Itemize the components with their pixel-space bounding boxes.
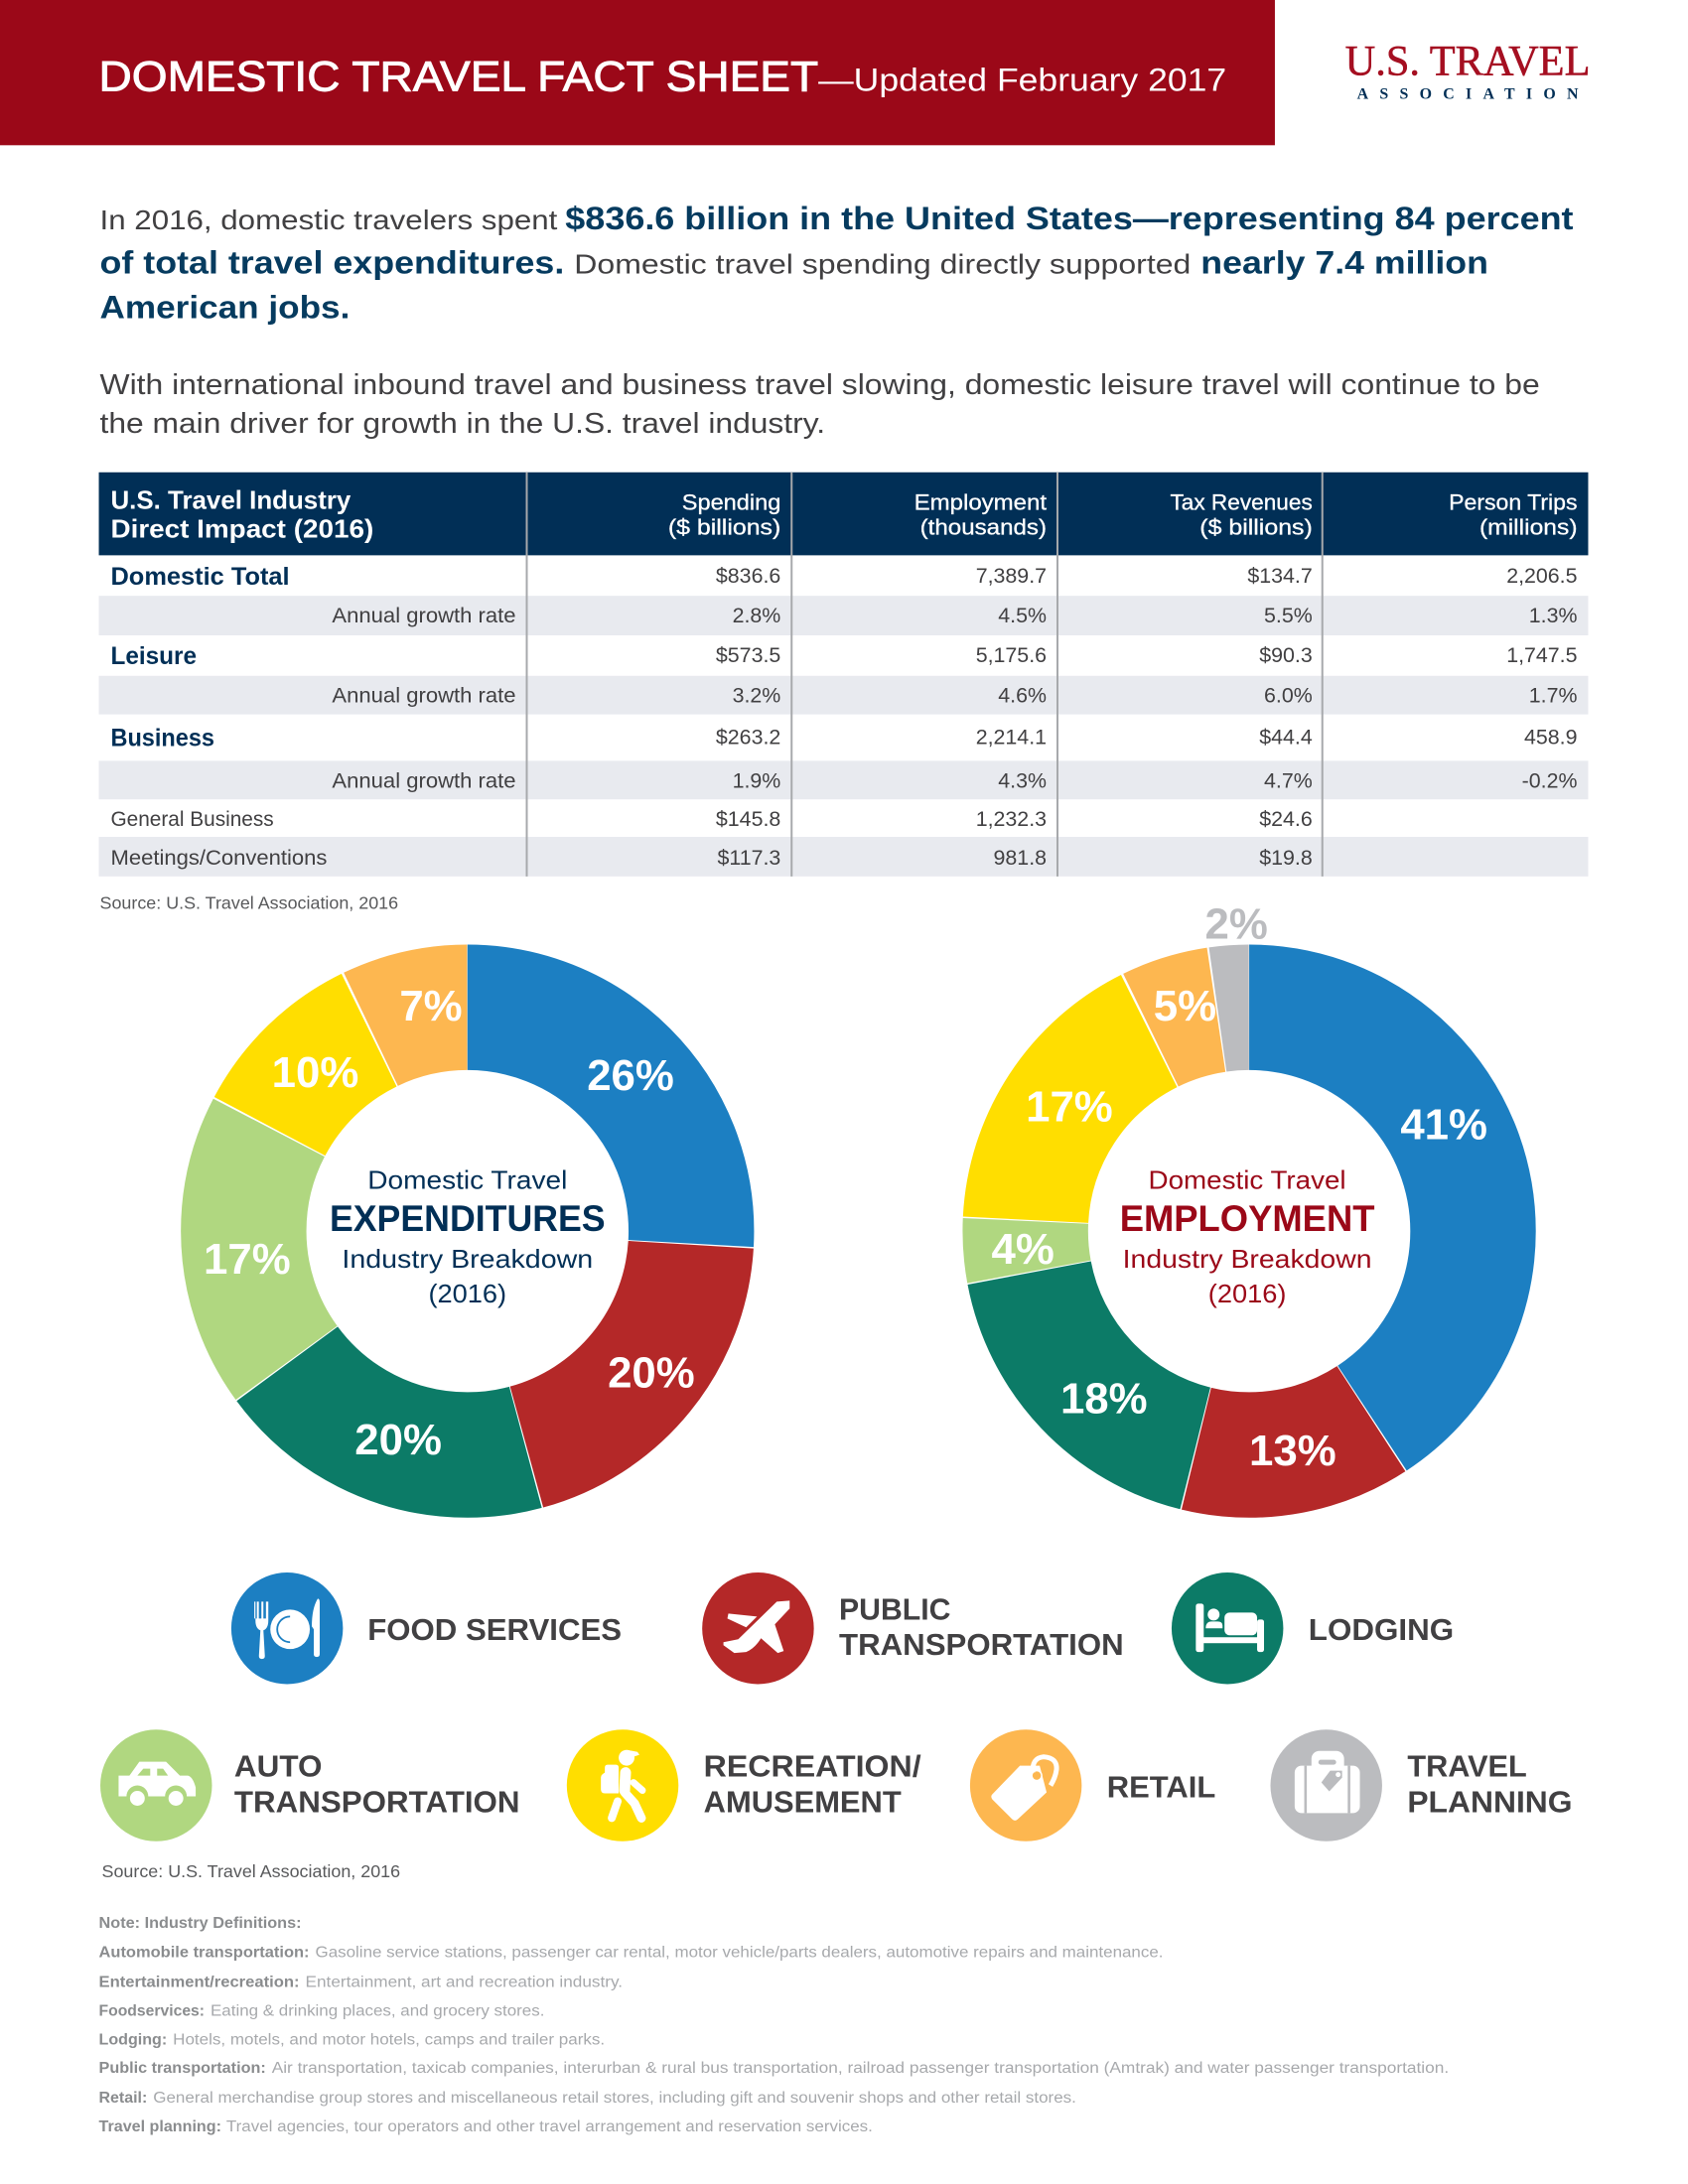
industry definitions note: Gasoline service stations, passenger car rental, motor vehicle/parts dealers, automotive repairs and maintenance. <box>316 1945 1163 1962</box>
donut chart: expenditures <box>204 982 695 1464</box>
legend label: PLANNING <box>1407 1784 1573 1819</box>
intro paragraph: of total travel expenditures. <box>100 244 564 281</box>
row: domestic total: Domestic Total <box>110 563 290 591</box>
row: meetings and conventions <box>110 846 1313 870</box>
row: meetings and conventions: Meetings/Conventions <box>110 847 327 870</box>
row: leisure: 1,747.5 <box>1506 643 1578 667</box>
icon: price tag <box>970 1729 1081 1842</box>
legend label: TRANSPORTATION <box>234 1784 520 1819</box>
row: domestic growth: 1.3% <box>1529 604 1578 627</box>
row: domestic growth: 5.5% <box>1264 604 1313 627</box>
icon: fork, plate and knife <box>231 1572 343 1685</box>
industry definitions note: Automobile transportation: <box>99 1945 310 1962</box>
legend source: Source: U.S. Travel Association, 2016 <box>102 1861 400 1881</box>
row: leisure: Leisure <box>110 642 197 670</box>
legend: auto transportation <box>100 1729 520 1842</box>
percentage labels <box>204 982 695 1464</box>
legend label <box>704 1749 921 1819</box>
row: domestic total: $134.7 <box>1247 564 1313 588</box>
legend label: RETAIL <box>1107 1769 1215 1804</box>
icon: airplane <box>702 1572 814 1685</box>
legend: public transportation <box>702 1572 1124 1685</box>
intro paragraph: American jobs. <box>100 288 350 325</box>
row: business growth <box>332 768 1578 792</box>
legend label: TRAVEL <box>1407 1749 1527 1784</box>
row: meetings and conventions: $19.8 <box>1259 846 1313 870</box>
row: leisure growth: 4.6% <box>998 684 1047 708</box>
donut centre label: Domestic Travel <box>367 1166 567 1194</box>
row: business <box>110 724 1578 751</box>
intro paragraph <box>100 200 1574 325</box>
donut centre label <box>1120 1166 1375 1308</box>
legend label <box>1407 1749 1573 1819</box>
industry definitions note: Lodging: <box>99 2031 167 2048</box>
row: business growth: 1.9% <box>733 768 780 792</box>
industry definitions note: Hotels, motels, and motor hotels, camps and trailer parks. <box>173 2031 605 2048</box>
table header: Employment <box>914 490 1047 515</box>
row: domestic growth: 2.8% <box>733 604 780 627</box>
donut centre label: EXPENDITURES <box>330 1198 606 1239</box>
donut centre label: Industry Breakdown <box>342 1246 593 1274</box>
row: domestic growth: Annual growth rate <box>332 605 516 627</box>
row: leisure growth: 1.7% <box>1529 684 1578 708</box>
row: business: 458.9 <box>1524 725 1578 749</box>
row: business: $263.2 <box>716 725 780 749</box>
percentage labels: 18% <box>1060 1374 1148 1423</box>
row: leisure growth <box>332 684 1578 708</box>
row: general business: $24.6 <box>1259 807 1313 831</box>
legend: recreation and amusement <box>567 1729 921 1842</box>
donut centre label: Industry Breakdown <box>1123 1246 1371 1274</box>
table header: Direct Impact (2016) <box>110 515 373 543</box>
row: business: Business <box>110 724 214 751</box>
donut centre label: EMPLOYMENT <box>1120 1198 1375 1239</box>
industry definitions note <box>99 1915 1449 2135</box>
row: business growth: 4.3% <box>998 768 1047 792</box>
legend label: PUBLIC <box>839 1591 950 1626</box>
industry definitions note: Travel planning: <box>99 2118 221 2135</box>
donut centre label: (2016) <box>428 1281 506 1308</box>
row: general business: 1,232.3 <box>976 807 1047 831</box>
row: domestic growth <box>332 604 1578 627</box>
table source: Source: U.S. Travel Association, 2016 <box>100 893 398 913</box>
legend label <box>234 1749 520 1819</box>
row: leisure: 5,175.6 <box>976 643 1047 667</box>
industry definitions note: Entertainment/recreation: <box>99 1975 300 1991</box>
donut centre label: Domestic Travel <box>1149 1166 1346 1194</box>
legend: retail <box>970 1729 1215 1842</box>
icon: suitcase <box>1270 1729 1382 1842</box>
percentage labels: 17% <box>204 1235 291 1284</box>
legend label: RECREATION/ <box>704 1749 921 1784</box>
donut centre label: (2016) <box>1208 1281 1286 1308</box>
header banner <box>0 0 1275 145</box>
row: domestic total: 7,389.7 <box>976 564 1047 588</box>
industry definitions note: Retail: <box>99 2090 147 2107</box>
percentage labels: 4% <box>992 1225 1055 1274</box>
percentage labels: 2% <box>1204 900 1268 949</box>
table header: U.S. Travel Industry <box>110 487 352 515</box>
percentage labels <box>992 900 1487 1475</box>
row: leisure growth: 6.0% <box>1264 684 1313 708</box>
legend: lodging <box>1172 1572 1454 1685</box>
table header: (thousands) <box>920 514 1047 539</box>
row: leisure: $90.3 <box>1259 643 1313 667</box>
percentage labels: 20% <box>354 1416 442 1464</box>
legend: travel planning <box>1270 1729 1573 1842</box>
row: general business: $145.8 <box>716 807 780 831</box>
legend label <box>839 1591 1124 1662</box>
title date: —Updated February 2017 <box>818 62 1226 98</box>
legend label: AUTO <box>234 1749 322 1784</box>
row: leisure: $573.5 <box>716 643 780 667</box>
row: meetings and conventions: 981.8 <box>994 846 1047 870</box>
context paragraph <box>100 369 1540 440</box>
donut centre label <box>330 1166 606 1308</box>
row: business growth: -0.2% <box>1522 768 1578 792</box>
row: leisure growth: Annual growth rate <box>332 685 516 708</box>
row: domestic total: $836.6 <box>716 564 780 588</box>
percentage labels: 7% <box>399 982 463 1030</box>
row: meetings and conventions: $117.3 <box>718 846 780 870</box>
table header: ($ billions) <box>1199 514 1313 539</box>
donut chart: employment <box>992 900 1487 1475</box>
logo: U.S. Travel Association: ASSOCIATION <box>1357 86 1579 103</box>
industry definitions note: Foodservices: <box>99 2002 205 2019</box>
percentage labels: 20% <box>608 1348 695 1397</box>
context paragraph: With international inbound travel and business travel slowing, domestic leisure travel will continue to be <box>100 369 1540 401</box>
row: domestic growth: 4.5% <box>998 604 1047 627</box>
table header: Person Trips <box>1449 490 1578 515</box>
percentage labels: 17% <box>1026 1083 1113 1132</box>
legend label: TRANSPORTATION <box>839 1627 1124 1662</box>
row: general business <box>110 807 1313 831</box>
legend: food services <box>231 1572 622 1685</box>
row: business growth: 4.7% <box>1264 768 1313 792</box>
context paragraph: the main driver for growth in the U.S. travel industry. <box>100 408 825 440</box>
intro paragraph: In 2016, domestic travelers spent <box>100 205 558 235</box>
legend label: LODGING <box>1309 1612 1454 1647</box>
percentage labels: 26% <box>587 1051 674 1100</box>
icon: bed <box>1172 1572 1283 1685</box>
row: business growth: Annual growth rate <box>332 769 516 792</box>
legend label: FOOD SERVICES <box>367 1612 622 1647</box>
industry definitions note: Air transportation, taxicab companies, interurban & rural bus transportation, railroad passenger transportation (Amtrak) and water passenger transportation. <box>272 2060 1449 2077</box>
industry definitions note: Entertainment, art and recreation industry. <box>306 1975 623 1991</box>
row: leisure growth: 3.2% <box>733 684 780 708</box>
percentage labels: 5% <box>1154 982 1216 1030</box>
logo: U.S. Travel Association: U.S. TRAVEL <box>1345 38 1590 85</box>
percentage labels: 10% <box>272 1048 358 1097</box>
row: business: $44.4 <box>1259 725 1313 749</box>
intro paragraph: $836.6 billion in the United States—representing 84 percent <box>565 200 1574 236</box>
table header: (millions) <box>1479 514 1578 539</box>
title: DOMESTIC TRAVEL FACT SHEET <box>99 54 818 101</box>
industry definitions note: Travel agencies, tour operators and other travel arrangement and reservation services. <box>226 2118 873 2135</box>
row: domestic total: 2,206.5 <box>1506 564 1578 588</box>
percentage labels: 41% <box>1400 1101 1487 1150</box>
icon: hiker <box>567 1729 678 1842</box>
table header: Spending <box>682 490 780 515</box>
row: domestic total <box>110 563 1578 591</box>
table header: Tax Revenues <box>1170 490 1313 515</box>
industry definitions note: Public transportation: <box>99 2060 266 2077</box>
percentage labels: 13% <box>1249 1427 1336 1475</box>
table header <box>110 487 1578 543</box>
industry definitions note: Note: Industry Definitions: <box>99 1915 302 1932</box>
legend label: AMUSEMENT <box>704 1784 902 1819</box>
intro paragraph: Domestic travel spending directly supported <box>574 249 1191 280</box>
row: leisure <box>110 642 1578 670</box>
impact table <box>99 473 1588 877</box>
industry definitions note: Eating & drinking places, and grocery stores. <box>211 2002 544 2019</box>
table header: ($ billions) <box>668 514 780 539</box>
row: general business: General Business <box>110 808 274 831</box>
intro paragraph: nearly 7.4 million <box>1200 244 1488 281</box>
industry definitions note: General merchandise group stores and miscellaneous retail stores, including gift and souvenir shops and other retail stores. <box>153 2090 1076 2107</box>
row: business: 2,214.1 <box>976 725 1047 749</box>
icon: car <box>100 1729 211 1842</box>
